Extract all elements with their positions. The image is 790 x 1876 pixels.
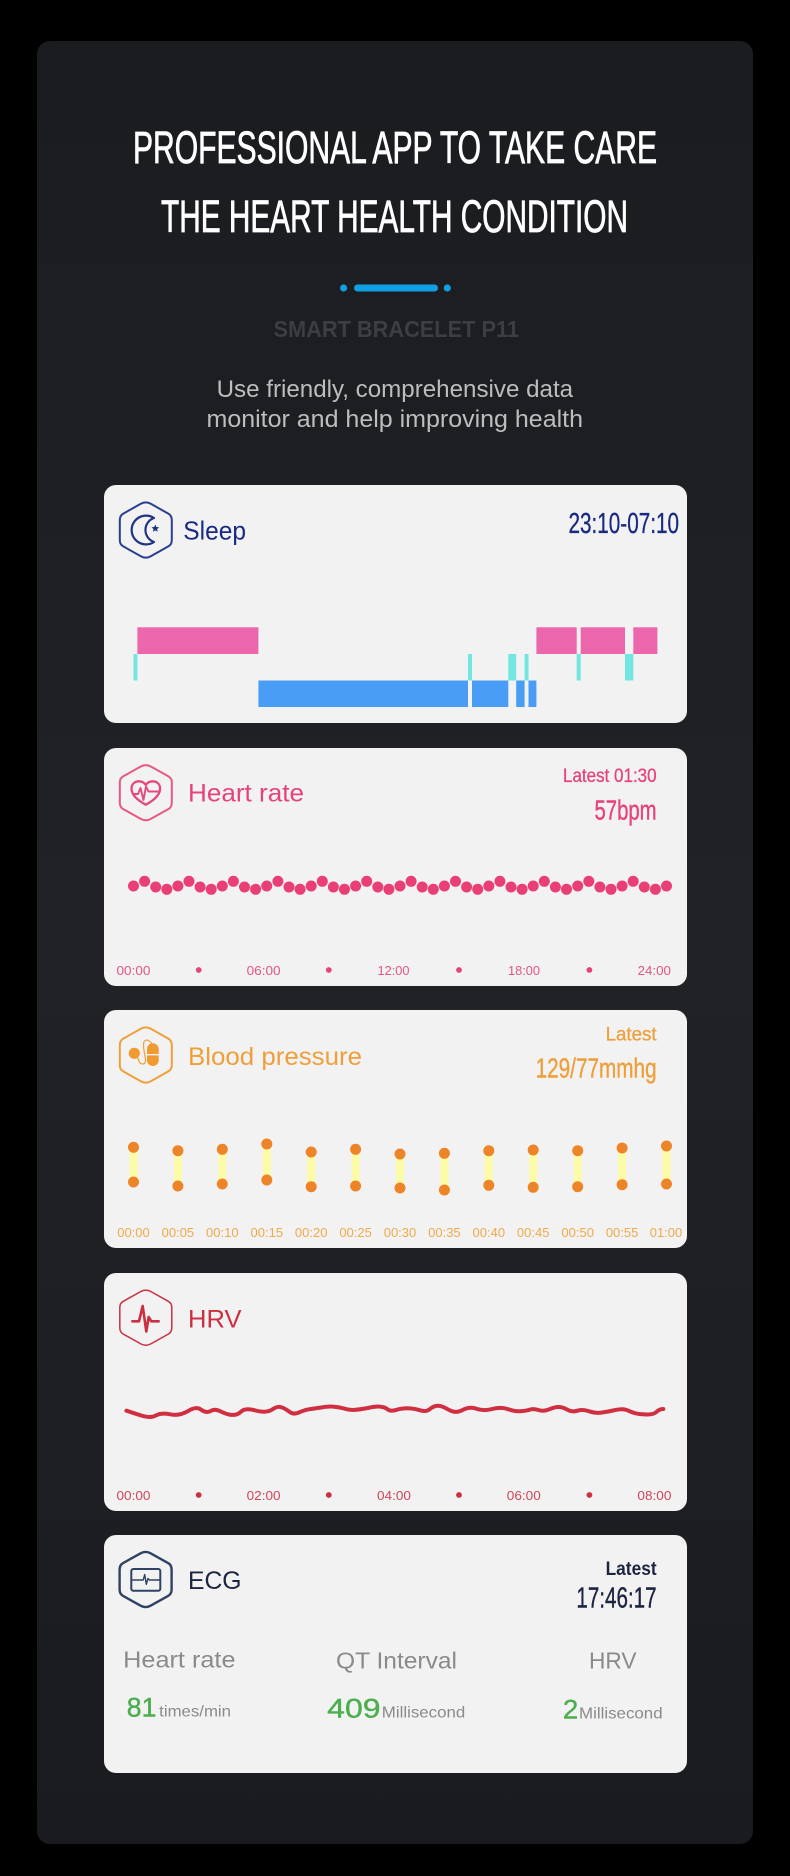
icon: moon and star — [120, 502, 172, 558]
line chart: HRV — [126, 1406, 663, 1417]
metric: heart rate: 81 — [127, 1693, 156, 1723]
icon: ECG monitor — [120, 1552, 172, 1607]
panel: HRV — [104, 1273, 687, 1511]
time axis: blood pressure: 00:00 — [117, 1225, 150, 1240]
time axis: blood pressure — [117, 1225, 682, 1240]
heading: heart rate: Heart rate — [188, 780, 304, 808]
time axis: blood pressure: 00:55 — [606, 1225, 638, 1240]
panel: heart rate — [104, 748, 687, 986]
time axis: heart rate: 06:00 — [247, 963, 281, 978]
time axis: blood pressure: 00:35 — [428, 1225, 461, 1240]
divider: blue bar and dots — [340, 284, 451, 292]
time axis: HRV: 04:00 — [377, 1488, 411, 1503]
heading: HRV: HRV — [188, 1305, 242, 1333]
dot chart: heart rate — [134, 881, 666, 889]
latest value: 57bpm — [594, 794, 657, 825]
metric: QT interval: QT Interval — [336, 1647, 457, 1673]
time axis: heart rate — [116, 963, 671, 978]
description text: Use friendly, comprehensive data — [217, 376, 574, 403]
metric: QT interval — [327, 1647, 465, 1724]
icon: blood pressure pump — [120, 1027, 172, 1083]
time axis: blood pressure: 00:05 — [162, 1225, 194, 1240]
time axis: heart rate: 12:00 — [378, 963, 410, 978]
time axis: HRV — [116, 1488, 671, 1503]
latest time: Latest 01:30 — [563, 766, 657, 787]
description text: monitor and help improving health — [206, 406, 583, 433]
time axis: blood pressure: 00:25 — [339, 1225, 372, 1240]
latest time: 17:46:17 — [576, 1582, 657, 1614]
time axis: heart rate: 00:00 — [116, 963, 150, 978]
sleep stage chart — [134, 627, 657, 707]
time axis: heart rate: 18:00 — [508, 963, 540, 978]
time axis: HRV: 00:00 — [116, 1488, 150, 1503]
panel: ECG — [104, 1535, 687, 1773]
time axis: blood pressure: 00:10 — [206, 1225, 239, 1240]
time axis: HRV: 08:00 — [637, 1488, 671, 1503]
latest value: 129/77mmhg — [536, 1053, 657, 1084]
metric: HRV — [563, 1647, 663, 1725]
heading: sleep: Sleep — [183, 515, 246, 545]
time axis: blood pressure: 00:50 — [561, 1225, 594, 1240]
subtitle: product name: SMART BRACELET P11 — [274, 316, 519, 342]
time axis: blood pressure: 00:45 — [517, 1225, 549, 1240]
metric: heart rate: times/min — [159, 1704, 231, 1721]
metric: QT interval: Millisecond — [382, 1705, 465, 1722]
panel: blood pressure — [104, 1010, 687, 1248]
metric: QT interval: 409 — [327, 1694, 381, 1724]
time axis: blood pressure: 01:00 — [650, 1225, 682, 1240]
time axis: blood pressure: 00:30 — [384, 1225, 416, 1240]
time axis: blood pressure: 00:40 — [473, 1225, 505, 1240]
metric: heart rate: Heart rate — [123, 1647, 236, 1673]
time axis: blood pressure: 00:20 — [295, 1225, 327, 1240]
description text — [206, 376, 583, 433]
metric: HRV: 2 — [563, 1695, 578, 1725]
metric: HRV: HRV — [589, 1647, 637, 1673]
heading: blood pressure: Blood pressure — [188, 1043, 362, 1071]
metric: HRV: Millisecond — [579, 1706, 663, 1723]
heading: ECG: ECG — [188, 1567, 242, 1595]
panel: sleep — [104, 485, 687, 723]
icon: pulse — [120, 1290, 172, 1345]
latest label: Latest — [606, 1025, 657, 1046]
metric: heart rate — [123, 1647, 236, 1723]
time range: 23:10-07:10 — [568, 508, 679, 540]
time axis: blood pressure: 00:15 — [251, 1225, 283, 1240]
range chart: blood pressure — [134, 1144, 666, 1190]
latest label: Latest — [606, 1559, 657, 1580]
title — [133, 122, 657, 242]
time axis: HRV: 06:00 — [507, 1488, 541, 1503]
time axis: HRV: 02:00 — [247, 1488, 281, 1503]
time axis: heart rate: 24:00 — [638, 963, 671, 978]
icon: heart with pulse — [120, 765, 172, 820]
